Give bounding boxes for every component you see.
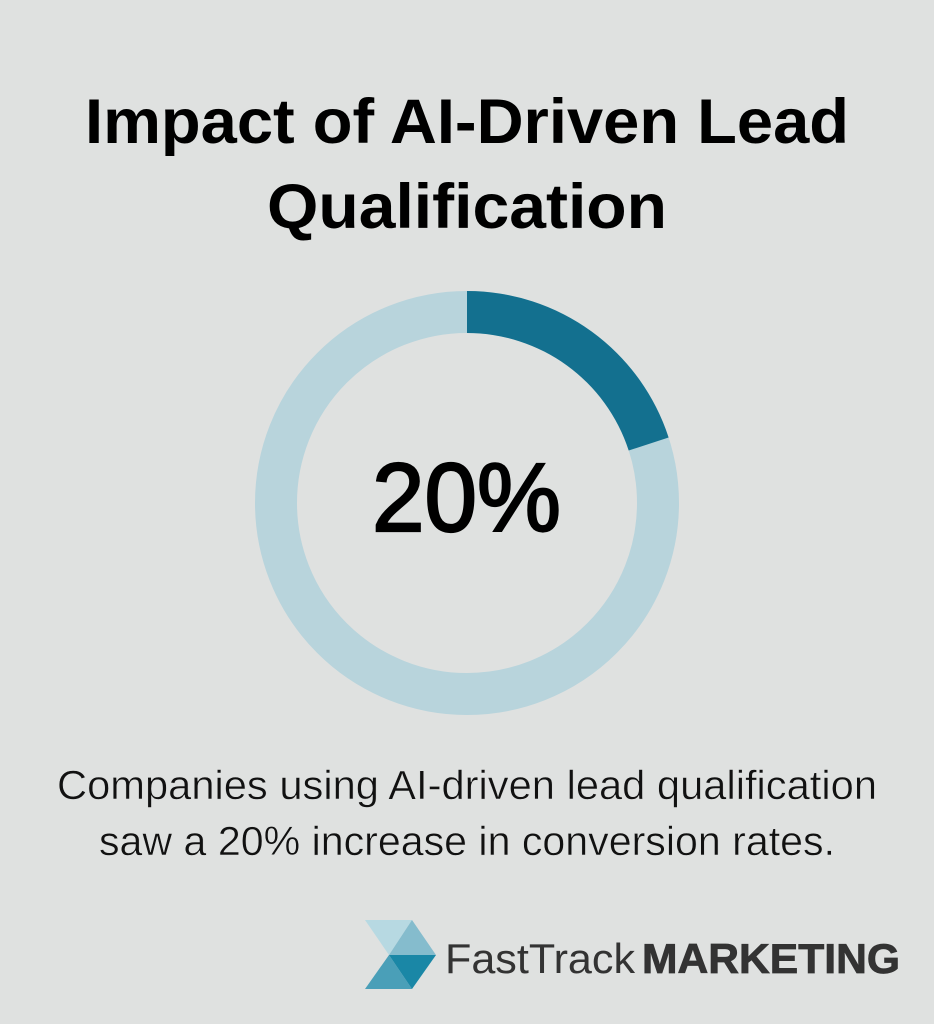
logo wordmark: [445, 935, 900, 982]
donut chart: 20%: [276, 291, 669, 694]
title: Impact of AI-Driven Lead: [85, 87, 849, 157]
title: Qualification: [267, 172, 667, 242]
description text: saw a 20% increase in conversion rates.: [99, 818, 835, 864]
logo wordmark: FastTrack: [445, 935, 636, 982]
description text: [57, 762, 877, 864]
description text: Companies using AI-driven lead qualification: [57, 762, 877, 808]
logo wordmark: MARKETING: [642, 935, 900, 982]
logo: [365, 920, 900, 989]
title: [85, 87, 849, 242]
icon: logo mark: [365, 920, 436, 989]
donut center value: 20%: [372, 443, 561, 552]
